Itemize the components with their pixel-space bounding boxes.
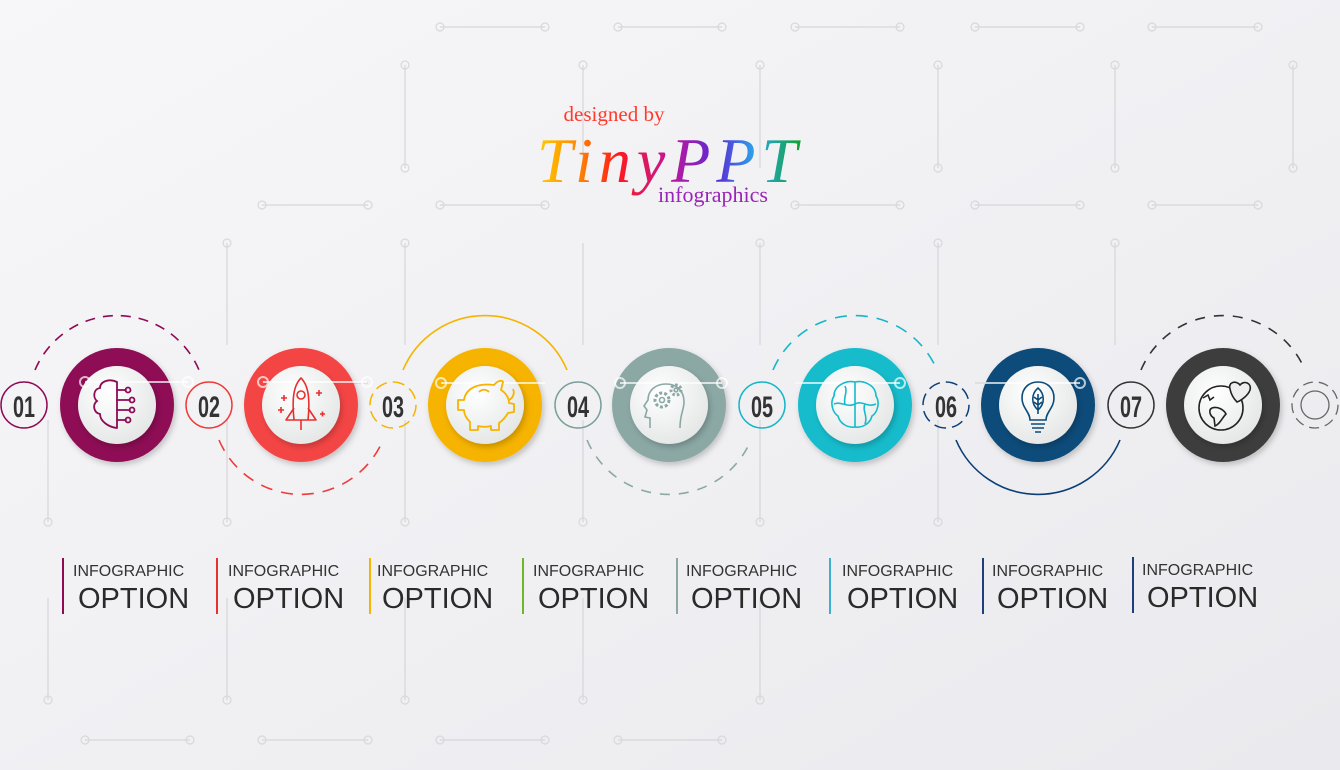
label 7 — [982, 558, 1108, 615]
label 5: INFOGRAPHIC — [686, 563, 797, 580]
label 3: INFOGRAPHIC — [377, 563, 488, 580]
number circles: 06 — [935, 391, 957, 424]
label 3 — [369, 558, 493, 615]
label 1: INFOGRAPHIC — [73, 563, 184, 580]
rings — [60, 348, 1280, 462]
number circles: 05 — [751, 391, 773, 424]
label 5 — [676, 558, 802, 615]
labels — [62, 557, 1258, 615]
label 2: OPTION — [233, 583, 344, 615]
logo: designed by TinyPPT infographics: designed by — [564, 102, 665, 126]
label 8: OPTION — [1147, 582, 1258, 614]
label 6: INFOGRAPHIC — [842, 563, 953, 580]
number circles: 04 — [567, 391, 589, 424]
icon: head with gears — [644, 384, 684, 428]
label 2: INFOGRAPHIC — [228, 563, 339, 580]
logo: designed by TinyPPT infographics: infographics — [658, 182, 768, 207]
icon: globe with heart — [1199, 382, 1250, 430]
label 1 — [62, 558, 189, 615]
icon: puzzle brain — [832, 382, 878, 427]
icon: lightbulb with leaf — [1022, 382, 1054, 432]
number circles: 07 — [1120, 391, 1142, 424]
arcs — [35, 316, 1305, 494]
label 2 — [216, 558, 344, 615]
label 7: OPTION — [997, 583, 1108, 615]
icon: rocket — [278, 378, 325, 430]
label 6 — [829, 558, 958, 615]
label 6: OPTION — [847, 583, 958, 615]
number circles: 02 — [198, 391, 220, 424]
label 4: OPTION — [538, 583, 649, 615]
logo: designed by TinyPPT infographics: TinyPPT — [537, 125, 803, 196]
icon: brain circuit — [94, 380, 134, 428]
logo: designed by TinyPPT infographics — [537, 102, 803, 207]
icon: piggy bank — [458, 381, 514, 430]
label 1: OPTION — [78, 583, 189, 615]
number circles — [1, 382, 1338, 428]
label 4 — [522, 558, 649, 615]
label 5: OPTION — [691, 583, 802, 615]
number circles: 01 — [13, 391, 35, 424]
label 8 — [1132, 557, 1258, 614]
label 8: INFOGRAPHIC — [1142, 562, 1253, 579]
label 4: INFOGRAPHIC — [533, 563, 644, 580]
label 7: INFOGRAPHIC — [992, 563, 1103, 580]
label 3: OPTION — [382, 583, 493, 615]
number circles: 03 — [382, 391, 404, 424]
